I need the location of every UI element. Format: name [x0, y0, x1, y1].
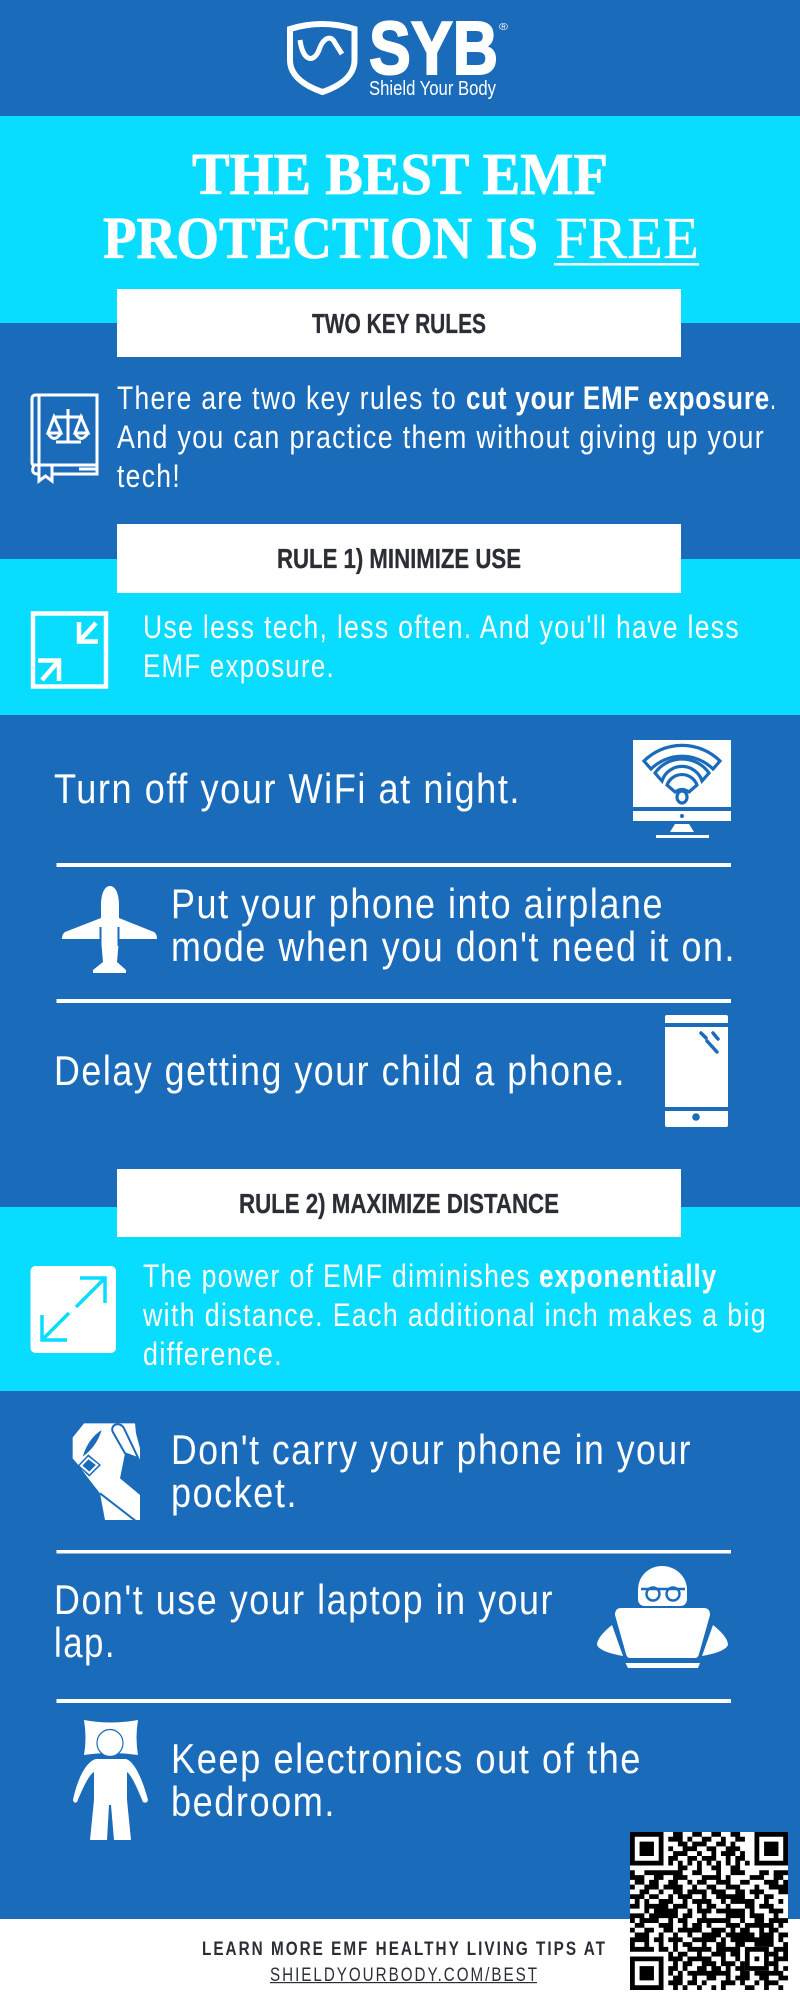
icon: person sleeping on pillow — [73, 1720, 148, 1840]
footer call to action: LEARN MORE EMF HEALTHY LIVING TIPS AT — [202, 1939, 607, 1960]
heading: rule 1: RULE 1) MINIMIZE USE — [277, 543, 521, 574]
icon: law book with scales — [32, 395, 97, 481]
panel: rule 1 band — [0, 559, 800, 715]
footer call to action: SHIELDYOURBODY.COM/BEST — [270, 1965, 539, 1986]
footer call to action — [202, 1939, 607, 1986]
heading: rule 2: RULE 2) MAXIMIZE DISTANCE — [239, 1188, 559, 1219]
QR code — [630, 1832, 788, 1990]
tip: laptop: Don't use your laptop in your — [54, 1576, 554, 1623]
text block: rule 2 description: difference. — [143, 1336, 283, 1372]
text block: rule 2 description: The power of EMF diminishes — [143, 1258, 531, 1294]
text block: intro: There are two key rules to — [117, 380, 457, 416]
text block: intro — [117, 380, 776, 494]
tip: airplane mode: Put your phone into airplane — [171, 880, 664, 927]
title: THE BEST EMF — [192, 141, 608, 207]
tip: pocket: Don't carry your phone in your — [171, 1426, 692, 1473]
icon: minimize arrows — [33, 614, 106, 686]
title — [103, 141, 699, 271]
divider 4 — [56, 1699, 731, 1703]
icon: phone — [665, 1015, 728, 1127]
icon: phone in pocket — [73, 1423, 140, 1524]
heading: two key rules: TWO KEY RULES — [312, 308, 486, 339]
text block: intro: . — [770, 380, 776, 416]
registered mark: ® — [499, 22, 509, 33]
tip: laptop: lap. — [54, 1619, 116, 1666]
text block: rule 2 description: exponentially — [539, 1258, 717, 1294]
tip: delay phone: Delay getting your child a phone. — [54, 1047, 626, 1094]
icon: airplane — [62, 886, 157, 973]
tip: pocket: pocket. — [171, 1469, 298, 1516]
icon: shield — [290, 24, 354, 92]
tip: bedroom: bedroom. — [171, 1778, 336, 1825]
text block: intro: tech! — [117, 458, 181, 494]
panel: title band — [0, 116, 800, 323]
tip: laptop — [54, 1576, 554, 1666]
tip: turn off wifi: Turn off your WiFi at night. — [54, 765, 521, 812]
title: FREE — [555, 205, 699, 271]
tip: airplane mode — [171, 880, 736, 970]
icon: maximize arrows — [30, 1266, 116, 1353]
heading: rule 1 — [117, 524, 681, 593]
tip: pocket — [171, 1426, 692, 1516]
heading: two key rules — [117, 289, 681, 357]
text block: rule 1 description: EMF exposure. — [143, 648, 335, 684]
logo: SYB Shield Your Body — [290, 6, 509, 100]
divider 1 — [56, 863, 731, 867]
icon: monitor with wifi — [633, 740, 731, 838]
heading: rule 2 — [117, 1169, 681, 1237]
logo tagline: Shield Your Body — [369, 78, 496, 100]
logo wordmark: SYB — [369, 6, 498, 90]
panel: rule 2 band — [0, 1207, 800, 1391]
text block: rule 1 description — [143, 609, 740, 684]
tip: bedroom — [171, 1735, 642, 1825]
panel: footer — [0, 1919, 800, 2000]
divider 2 — [56, 999, 731, 1003]
divider 3 — [56, 1550, 731, 1554]
title: PROTECTION IS — [103, 205, 538, 271]
icon: person with laptop — [597, 1566, 728, 1668]
tip: bedroom: Keep electronics out of the — [171, 1735, 642, 1782]
text block: rule 2 description — [142, 1258, 767, 1372]
